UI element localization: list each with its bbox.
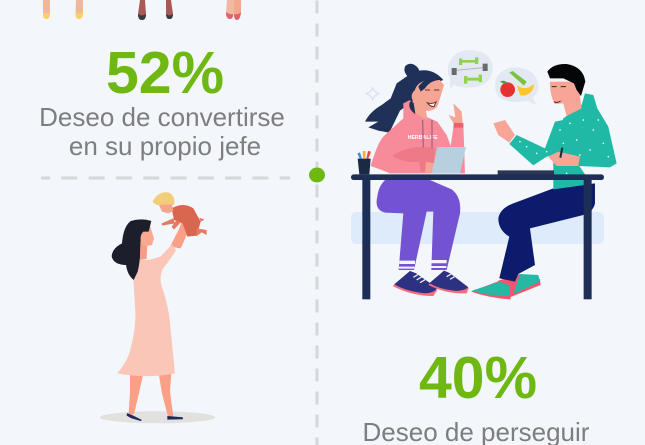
dress bbox=[117, 244, 176, 376]
woman: face and neck bbox=[412, 79, 444, 120]
statistic: 52 percent: 52% bbox=[106, 40, 224, 106]
sparkle bbox=[366, 88, 379, 100]
woman: mouth and eyes bbox=[425, 90, 439, 107]
baby hair bbox=[153, 192, 174, 205]
woman: hair back bbox=[365, 64, 443, 133]
man: hair bbox=[547, 64, 585, 96]
speech bubble: dumbbells bbox=[448, 50, 493, 89]
neck and face bbox=[139, 243, 147, 260]
man: teal hoodie bbox=[509, 93, 617, 189]
woman: pink hoodie bbox=[371, 100, 465, 173]
label: en su propio jefe: en su propio jefe bbox=[69, 131, 261, 161]
woman: drawstrings bbox=[423, 120, 432, 148]
tablet bbox=[432, 147, 466, 173]
man: navy trousers bbox=[498, 183, 595, 282]
man: face and neck bbox=[550, 82, 582, 116]
statistic: 52 percent bbox=[39, 40, 285, 161]
backdrop band bbox=[351, 212, 604, 244]
illustration: two people talking at table bbox=[351, 50, 617, 299]
woman: shoes bbox=[393, 271, 469, 296]
woman: hoodie logo: HERBALIFE bbox=[408, 135, 438, 141]
raised arm bbox=[170, 212, 191, 248]
man: hand with pen bbox=[548, 152, 580, 166]
icon: feet of second figure bbox=[138, 0, 173, 20]
man: eyes and mouth bbox=[552, 87, 566, 102]
table bbox=[351, 174, 604, 299]
timeline dot bbox=[309, 168, 325, 182]
man: shoes bbox=[471, 274, 541, 299]
speech bubble: fruit bbox=[495, 67, 538, 105]
statistic: 40 percent: 40% bbox=[419, 345, 537, 411]
baby body bbox=[172, 205, 201, 237]
illustration: mother lifting baby bbox=[100, 192, 215, 423]
woman: raised hand bbox=[449, 103, 463, 124]
statistic: 40 percent bbox=[363, 345, 590, 445]
pencil cup bbox=[357, 151, 371, 174]
woman: hand on tablet bbox=[425, 162, 447, 173]
hair bbox=[112, 219, 151, 280]
label: deseo de convertirse: Deseo de convertirse bbox=[39, 102, 285, 132]
legs bbox=[129, 373, 173, 417]
shoes bbox=[127, 413, 183, 421]
laptop on table bbox=[498, 170, 554, 175]
icon: feet of first figure bbox=[43, 0, 83, 19]
man: gesturing hand bbox=[493, 120, 515, 143]
woman: purple trousers bbox=[377, 180, 460, 270]
icon: feet of third figure bbox=[226, 0, 241, 20]
baby head bbox=[159, 203, 173, 213]
